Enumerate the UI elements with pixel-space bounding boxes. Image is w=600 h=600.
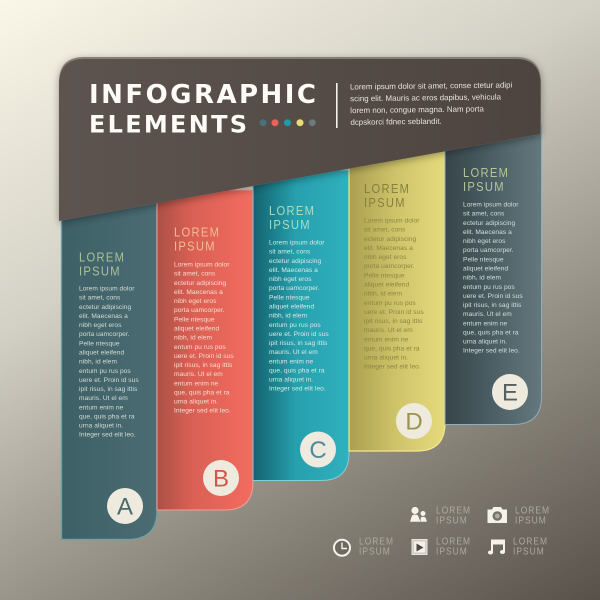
panel A body text: urna aliquet in.: [79, 423, 123, 430]
icon label: play: IPSUM: [436, 546, 468, 557]
panel D body text: entum enim ne: [364, 336, 409, 343]
panel D body text: Pelle ntesque: [364, 272, 405, 279]
badge A: A: [117, 494, 133, 520]
badge B: B: [213, 466, 229, 492]
panel E body text: ectetur adipiscing: [463, 220, 515, 227]
title: ELEMENTS: [89, 110, 247, 138]
panel A heading: [79, 250, 125, 279]
panel D heading: IPSUM: [364, 195, 406, 210]
panel C body text: entum pu rus pos: [269, 322, 321, 329]
panel C body text: mauris. Ut el em: [269, 349, 318, 356]
panel E body text: entum pu rus pos: [463, 284, 515, 291]
panel C heading: LOREM: [269, 203, 315, 218]
panel E body text: uere et. Proin id sus: [463, 293, 523, 300]
panel B body text: ipit risus, in sag ittis: [174, 362, 233, 369]
panel C heading: IPSUM: [269, 217, 311, 232]
icon label: clock: [359, 536, 394, 557]
panel E body text: aliquet eleifend: [463, 266, 508, 272]
panel A body text: que, quis pha et ra: [79, 413, 135, 420]
badge C: [300, 432, 336, 468]
panel D body text: Integer sed elit leo.: [364, 364, 421, 371]
panel D body text: mauris. Ut el em: [364, 327, 413, 334]
header panel: [59, 57, 541, 221]
panel A body text: mauris. Ut el em: [79, 395, 128, 402]
icon label: clock: IPSUM: [359, 546, 391, 557]
panel E body text: nibh, id elem: [463, 275, 501, 282]
panel C body text: uere et. Proin id sus: [269, 331, 329, 338]
panel A body text: Lorem ipsum dolor: [79, 286, 135, 292]
panel E body text: que, quis pha et ra: [463, 329, 519, 336]
panel A body text: ectetur adipiscing: [79, 304, 131, 311]
title: INFOGRAPHIC: [89, 80, 316, 110]
panel E body text: Lorem ipsum dolor: [463, 202, 519, 208]
panel C: [253, 170, 349, 480]
header description: lorem non, congue magna. Nam porta: [350, 104, 484, 115]
panel A heading: LOREM: [79, 250, 125, 265]
panel E body text: sit amet, cons: [463, 211, 505, 218]
panel D heading: LOREM: [364, 181, 410, 196]
panel A body text: Integer sed elit leo.: [79, 432, 136, 439]
panel C heading: [269, 203, 315, 232]
panel B body text: mauris. Ut el em: [174, 371, 223, 378]
panel D body text: nibh, id elem: [364, 291, 402, 298]
panel A body text: elit. Maecenas a: [79, 313, 128, 320]
panel B body text: Integer sed elit leo.: [174, 408, 231, 415]
panel C body text: porta uamcorper.: [269, 285, 320, 292]
panel B body text: nibh eget eros: [174, 298, 217, 305]
panel A body text: uere et. Proin id sus: [79, 377, 139, 384]
panel C body text: Integer sed elit leo.: [269, 386, 326, 393]
panel C body text: nibh, id elem: [269, 313, 307, 320]
panel D heading: [364, 181, 410, 210]
panel C body text: entum enim ne: [269, 358, 314, 365]
panel D body text: urna aliquet in.: [364, 355, 408, 362]
panel B body text: porta uamcorper.: [174, 307, 225, 314]
header description: dcpskorci fdnec seblandit.: [350, 117, 442, 127]
badge A: [107, 488, 143, 524]
badge E: [492, 374, 528, 410]
icon label: music: LOREM: [513, 536, 548, 547]
panel B body text: sit amet, cons: [174, 271, 216, 278]
panel C body text: sit amet, cons: [269, 249, 311, 256]
panel E body text: ipit risus, in sag ittis: [463, 302, 522, 309]
title: [89, 80, 316, 138]
panel C body text: Lorem ipsum dolor: [269, 240, 325, 246]
panel A body text: porta uamcorper.: [79, 331, 130, 338]
panel B body text: Lorem ipsum dolor: [174, 262, 230, 268]
icon label: people: IPSUM: [436, 515, 468, 526]
panel E body text: Pelle ntesque: [463, 256, 504, 263]
panel C body text: que, quis pha et ra: [269, 367, 325, 374]
panel E body text: elit. Maecenas a: [463, 229, 512, 236]
panel C body text: urna aliquet in.: [269, 377, 313, 384]
panel E heading: [463, 165, 509, 194]
icon: clock: [334, 540, 350, 556]
panel B body text: ectetur adipiscing: [174, 280, 226, 287]
panel E body text: mauris. Ut el em: [463, 311, 512, 318]
panel E body text: porta uamcorper.: [463, 247, 514, 254]
panel C body text: nibh eget eros: [269, 276, 312, 283]
panel A body text: Pelle ntesque: [79, 340, 120, 347]
icon label: camera: IPSUM: [515, 515, 547, 526]
panel D body text: entum pu rus pos: [364, 300, 416, 307]
panel C body text: elit. Maecenas a: [269, 267, 318, 274]
header divider: [336, 83, 338, 128]
icon row: [334, 505, 550, 557]
icon label: people: LOREM: [436, 505, 471, 516]
panel B body text: entum enim ne: [174, 380, 219, 387]
panel B body text: nibh, id elem: [174, 335, 212, 342]
panel A heading: IPSUM: [79, 264, 121, 279]
header description: Lorem ipsum dolor sit amet, conse ctetur adipi: [350, 81, 513, 91]
panel A body text: sit amet, cons: [79, 295, 121, 302]
icon label: play: [436, 536, 471, 557]
panel D body text: Lorem ipsum dolor: [364, 218, 420, 224]
panel E body text: entum enim ne: [463, 320, 508, 327]
icon label: clock: LOREM: [359, 536, 394, 547]
panel E body text: nibh eget eros: [463, 238, 506, 245]
header description: scing elit. Mauris ac eros dapibus, vehicula: [350, 92, 502, 103]
icon label: music: [513, 536, 548, 557]
icon: play: [412, 540, 427, 554]
badge D: D: [405, 408, 423, 436]
panel E body text: Integer sed elit leo.: [463, 348, 520, 355]
panel A body text: nibh, id elem: [79, 359, 117, 366]
panel B: [157, 190, 253, 510]
badge C: C: [309, 437, 327, 464]
panel A body text: ipit risus, in sag ittis: [79, 386, 138, 393]
panel A body text: entum enim ne: [79, 404, 124, 411]
badge B: [203, 460, 239, 496]
badge D: [396, 403, 432, 439]
panel D body text: nibh eget eros: [364, 254, 407, 261]
icon: camera: [488, 507, 507, 523]
panel A body text: nibh eget eros: [79, 322, 122, 329]
icon label: camera: LOREM: [515, 505, 550, 516]
panel A: [62, 200, 157, 540]
panel D body text: uere et. Proin id sus: [364, 309, 424, 316]
panel B body text: entum pu rus pos: [174, 344, 226, 351]
panel E: [445, 125, 542, 424]
panel B heading: [174, 225, 220, 254]
panel B body text: que, quis pha et ra: [174, 389, 230, 396]
panel C body text: aliquet eleifend: [269, 304, 314, 310]
icon label: play: LOREM: [436, 536, 471, 547]
panel D body text: porta uamcorper.: [364, 263, 415, 270]
panel D body text: ipit risus, in sag ittis: [364, 318, 423, 325]
panel E body text: urna aliquet in.: [463, 339, 507, 346]
panel E heading: IPSUM: [463, 179, 505, 194]
panel B heading: IPSUM: [174, 239, 216, 254]
panel B body text: elit. Maecenas a: [174, 289, 223, 296]
icon label: people: [436, 505, 471, 526]
color dots: [260, 119, 316, 126]
icon label: camera: [515, 505, 550, 526]
icon: music: [488, 540, 505, 554]
panel D body text: que, quis pha et ra: [364, 345, 420, 352]
panel B body text: aliquet eleifend: [174, 326, 219, 332]
panel B heading: LOREM: [174, 225, 220, 240]
panel D body text: ectetur adipiscing: [364, 236, 416, 243]
panel D: [349, 145, 445, 451]
panel B body text: Pelle ntesque: [174, 316, 215, 323]
panel D body text: elit. Maecenas a: [364, 245, 413, 252]
panel E heading: LOREM: [463, 165, 509, 180]
panel C body text: ectetur adipiscing: [269, 258, 321, 265]
icon label: music: IPSUM: [513, 546, 545, 557]
panel D body text: sit amet, cons: [364, 227, 406, 234]
panel B body text: uere et. Proin id sus: [174, 353, 234, 360]
panel D body text: aliquet eleifend: [364, 282, 409, 288]
panel A body text: entum pu rus pos: [79, 368, 131, 375]
panel C body text: Pelle ntesque: [269, 294, 310, 301]
badge E: E: [502, 380, 518, 406]
icon: people: [410, 507, 427, 522]
panel A body text: aliquet eleifend: [79, 350, 124, 356]
panel B body text: urna aliquet in.: [174, 399, 218, 406]
panel C body text: ipit risus, in sag ittis: [269, 340, 328, 347]
